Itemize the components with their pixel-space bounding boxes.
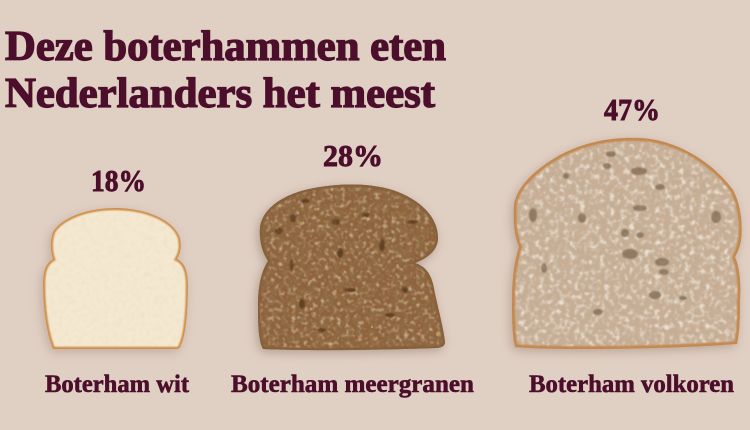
title: Nederlanders het meest [5,71,435,117]
panel: boterham wit [40,163,190,398]
percentage: 18%: 18% [91,163,146,198]
label: Boterham wit: Boterham wit [45,371,190,398]
percentage: 28%: 28% [323,138,383,173]
icon: wholewheat bread slice [508,134,746,353]
label: Boterham meergranen: Boterham meergranen [231,371,474,398]
icon: multigrain bread slice [255,180,448,353]
title: Deze boterhammen eten [5,24,446,70]
percentage: 47%: 47% [604,92,660,127]
label: Boterham volkoren: Boterham volkoren [529,371,734,398]
panel: boterham volkoren [508,92,746,398]
title [5,24,446,117]
panel: boterham meergranen [231,138,474,398]
icon: white bread slice [40,205,190,353]
